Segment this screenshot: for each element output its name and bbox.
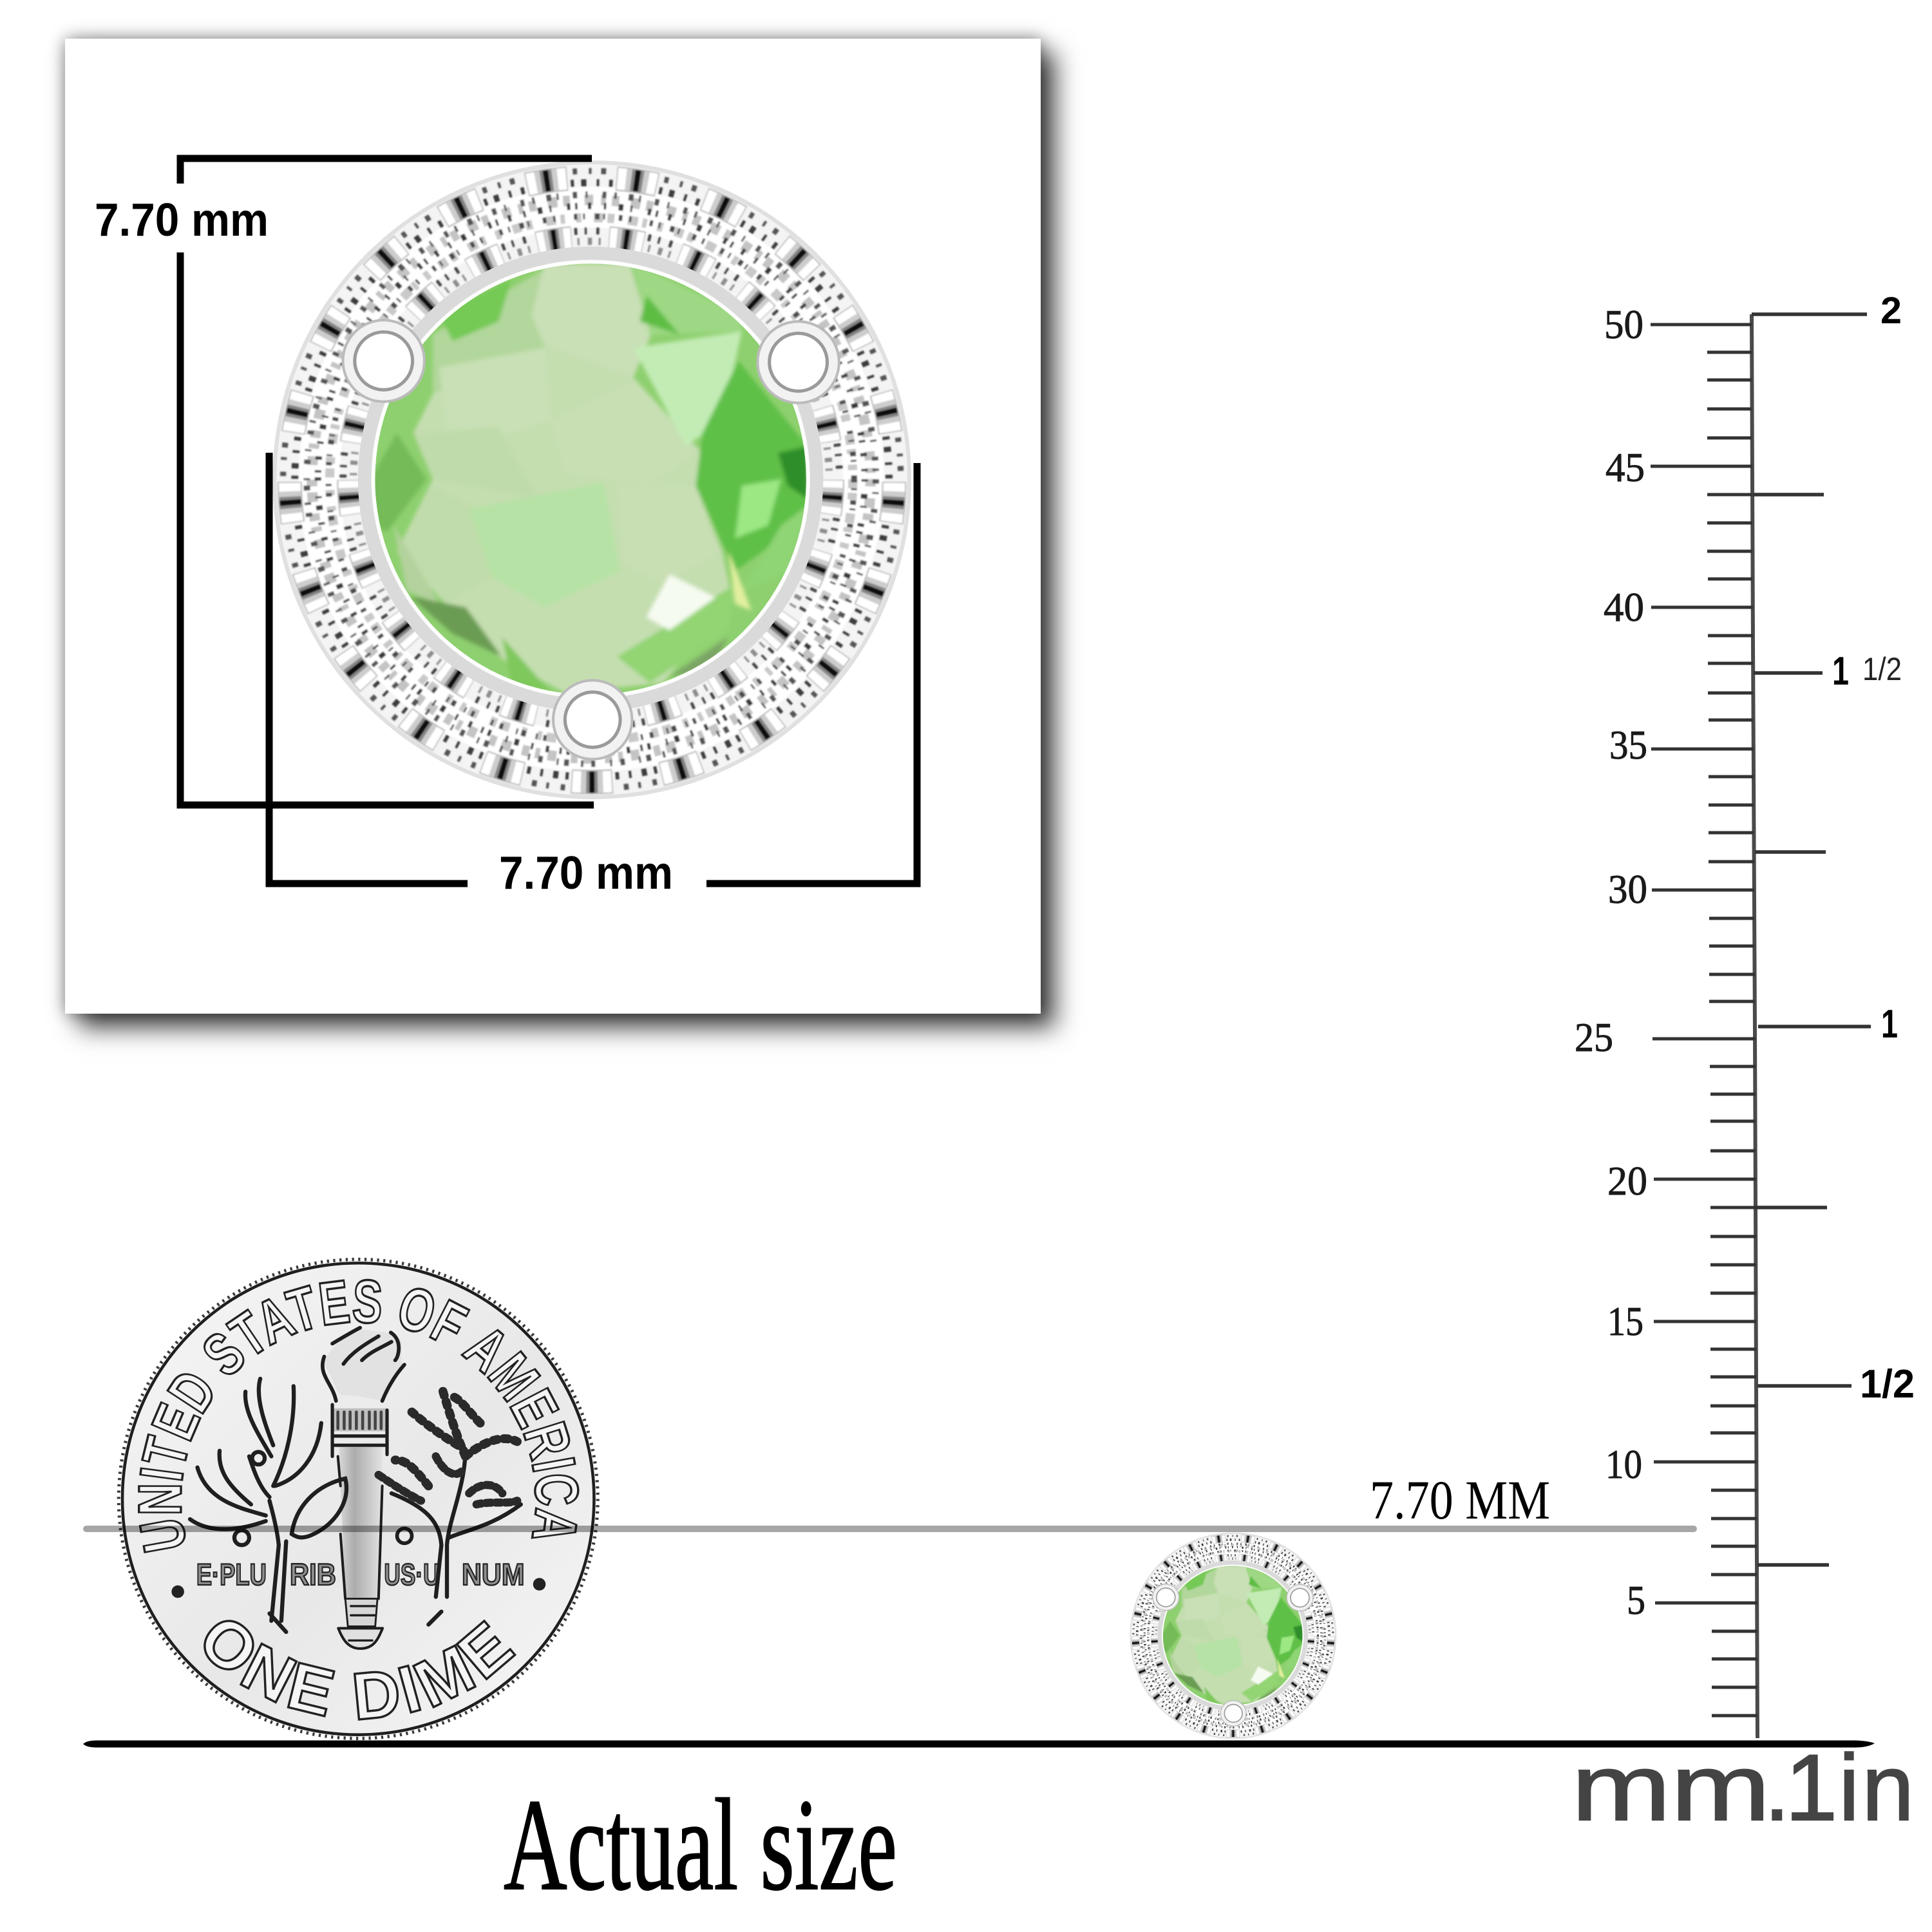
millimetre labels: 50: [1604, 301, 1643, 347]
height label: 7.70 mm: [95, 194, 269, 246]
halo ring: [274, 162, 909, 797]
unit label: [1571, 1735, 1914, 1840]
green gemstone: [367, 256, 814, 703]
7.70 mm measurement line: [83, 1526, 1697, 1532]
millimetre small ticks: [1707, 352, 1757, 1716]
millimetre labels: 40: [1604, 584, 1644, 630]
inch labels: 1: [1881, 1002, 1898, 1046]
bezel: [365, 253, 817, 705]
torch: [323, 1328, 404, 1649]
coin motto: US·U: [384, 1557, 440, 1591]
millimetre labels: 35: [1609, 722, 1647, 768]
panel: enlarged stud: [65, 39, 1041, 1014]
unit label: 1: [1785, 1735, 1837, 1840]
width dimension bracket: [269, 453, 917, 884]
inch labels: 1/2: [1862, 651, 1902, 687]
dime coin: [117, 1257, 600, 1740]
millimetre labels: 45: [1605, 444, 1645, 490]
inch labels: 2: [1880, 290, 1902, 332]
coin motto: E·PLU: [196, 1557, 267, 1591]
enlarged stud earring: [274, 162, 909, 797]
diamond points between metal blocks: [295, 183, 889, 777]
baseline: [83, 1740, 1875, 1748]
height dimension bracket: [180, 158, 594, 805]
inch labels: [1832, 290, 1915, 1406]
actual size caption: Actual size: [504, 1772, 897, 1918]
coin motto: [196, 1557, 525, 1591]
unit label: mm: [1571, 1735, 1770, 1840]
inch labels: 1/2: [1860, 1362, 1915, 1406]
unit label: n: [1862, 1735, 1914, 1840]
millimetre labels: 5: [1627, 1577, 1645, 1623]
millimetre labels: 30: [1608, 866, 1647, 912]
millimetre labels: 15: [1607, 1298, 1643, 1344]
olive branch: [190, 1379, 346, 1632]
coin lettering: one dime: ONE DIME: [204, 1619, 516, 1721]
metal blocks: [290, 178, 895, 782]
millimetre labels: 20: [1607, 1158, 1647, 1204]
coin dots: [171, 1578, 545, 1598]
actual size stud: [1130, 1533, 1336, 1738]
inch ticks: [1752, 314, 1871, 1565]
unit label: .: [1764, 1735, 1790, 1840]
millimetre labels: 10: [1605, 1441, 1642, 1487]
millimetre long ticks: [1651, 325, 1757, 1603]
coin lettering: united states of america: UNITED STATES OF AMERICA: [138, 1279, 580, 1553]
unit label: i: [1839, 1735, 1859, 1840]
coin motto: NUM: [462, 1557, 525, 1591]
ruler: [1575, 290, 1915, 1738]
inch labels: 1: [1832, 649, 1849, 694]
oak branch: [379, 1386, 521, 1625]
millimetre labels: [1575, 301, 1647, 1623]
coin body: [122, 1263, 594, 1735]
width label: 7.70 mm: [499, 848, 673, 899]
coin motto: RIB: [290, 1557, 336, 1591]
ruler axis: [1752, 314, 1757, 1738]
measurement label: 7.70 MM: [1370, 1469, 1550, 1531]
millimetre labels: 25: [1575, 1014, 1613, 1060]
prongs: [343, 320, 839, 759]
diamond belt: [283, 171, 901, 789]
